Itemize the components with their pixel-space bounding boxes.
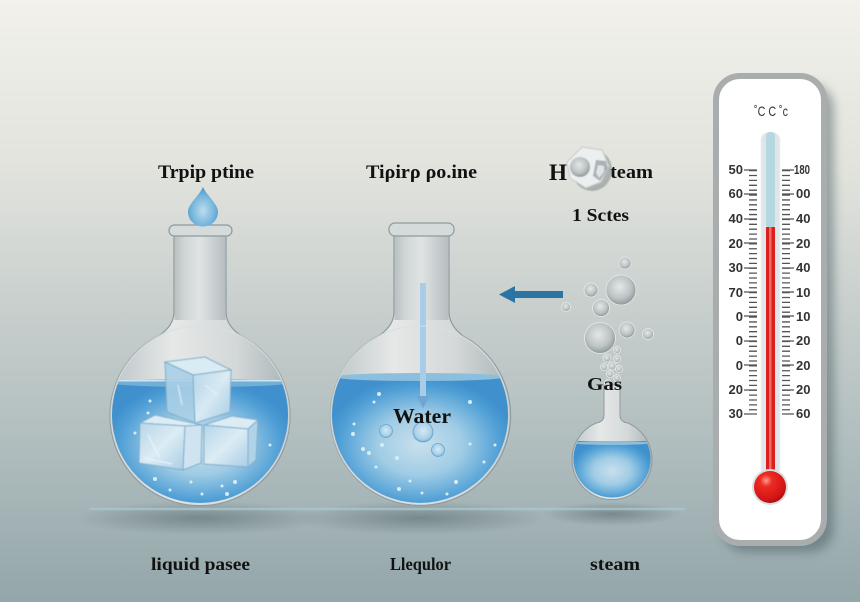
left scale numbers: 30 bbox=[729, 260, 743, 275]
right scale numbers: 00 bbox=[796, 186, 810, 201]
heading: steam: H bbox=[549, 160, 567, 185]
right scale ticks bbox=[782, 170, 794, 414]
heading: middle flask: Tiρirρ ρo.ine bbox=[366, 162, 477, 183]
left scale numbers: 70 bbox=[729, 285, 743, 300]
flask 1 neck bbox=[175, 236, 226, 320]
ice cube: bottom left bbox=[139, 415, 202, 470]
left scale numbers: 60 bbox=[729, 186, 743, 201]
glass tube bbox=[761, 132, 780, 477]
left scale ticks bbox=[744, 170, 757, 414]
icon: water drop bbox=[188, 187, 218, 226]
heading: left flask: Trpip ptine bbox=[158, 162, 254, 183]
label: steam: steam bbox=[590, 554, 640, 574]
left scale numbers: 50 bbox=[729, 162, 743, 177]
left scale numbers: 0 bbox=[736, 309, 743, 324]
flask 2 rim bbox=[389, 223, 454, 236]
right scale numbers: 20 bbox=[796, 382, 810, 397]
label: gas: Gas bbox=[587, 374, 622, 394]
heading: steam: team bbox=[610, 162, 653, 183]
left scale numbers: 40 bbox=[729, 211, 743, 226]
thermometer bbox=[716, 76, 834, 552]
flask: liquid water bbox=[325, 223, 515, 512]
left scale numbers: 0 bbox=[736, 358, 743, 373]
arrow: left bbox=[499, 286, 563, 303]
heading: steam bbox=[549, 160, 653, 185]
flask 1 glass bbox=[110, 236, 290, 506]
right scale numbers bbox=[794, 162, 810, 421]
flask 1 outline highlight bbox=[111, 326, 289, 504]
right scale numbers: 20 bbox=[796, 333, 810, 348]
flask 3 glass bbox=[572, 385, 652, 500]
label: liquor: Llequlor bbox=[390, 554, 451, 574]
flask: small steam flask bbox=[570, 385, 654, 501]
flask 1 water bbox=[112, 379, 288, 503]
left scale numbers: 20 bbox=[729, 382, 743, 397]
subheading: states: 1 Sctes bbox=[572, 205, 629, 225]
left scale numbers bbox=[729, 162, 743, 421]
down arrow bbox=[416, 283, 430, 408]
flask: ice in water bbox=[105, 225, 295, 510]
left scale numbers: 30 bbox=[729, 406, 743, 421]
right scale numbers: 20 bbox=[796, 236, 810, 251]
flask 3 water bbox=[574, 441, 650, 498]
right scale numbers: 40 bbox=[796, 260, 810, 275]
water bubbles bbox=[380, 422, 444, 456]
mercury bulb bbox=[752, 469, 788, 505]
mercury column bbox=[766, 227, 775, 477]
floor line and shadows bbox=[75, 501, 685, 535]
icon: crystal molecule bbox=[567, 147, 612, 191]
right scale numbers: 180 bbox=[794, 162, 810, 177]
flask 1 rim bbox=[169, 225, 232, 236]
unit label: ˚C C ˚c bbox=[754, 103, 788, 119]
ice cube: bottom right bbox=[204, 416, 258, 467]
right scale numbers: 10 bbox=[796, 285, 810, 300]
flask 2 glass bbox=[331, 236, 511, 505]
label: water: Water bbox=[393, 404, 451, 428]
left scale numbers: 20 bbox=[729, 236, 743, 251]
left scale numbers: 0 bbox=[736, 333, 743, 348]
right scale numbers: 60 bbox=[796, 406, 810, 421]
right scale numbers: 10 bbox=[796, 309, 810, 324]
thermometer casing bbox=[716, 76, 824, 543]
ice cube: top bbox=[165, 357, 231, 423]
flask 2 neck bbox=[395, 236, 449, 320]
flask 2 outline highlight bbox=[331, 326, 509, 504]
right scale numbers: 20 bbox=[796, 358, 810, 373]
right scale numbers: 40 bbox=[796, 211, 810, 226]
label: liquid phase: liquid pasee bbox=[151, 554, 250, 574]
gas bubbles bbox=[562, 257, 654, 386]
flask 2 water bbox=[332, 373, 508, 503]
